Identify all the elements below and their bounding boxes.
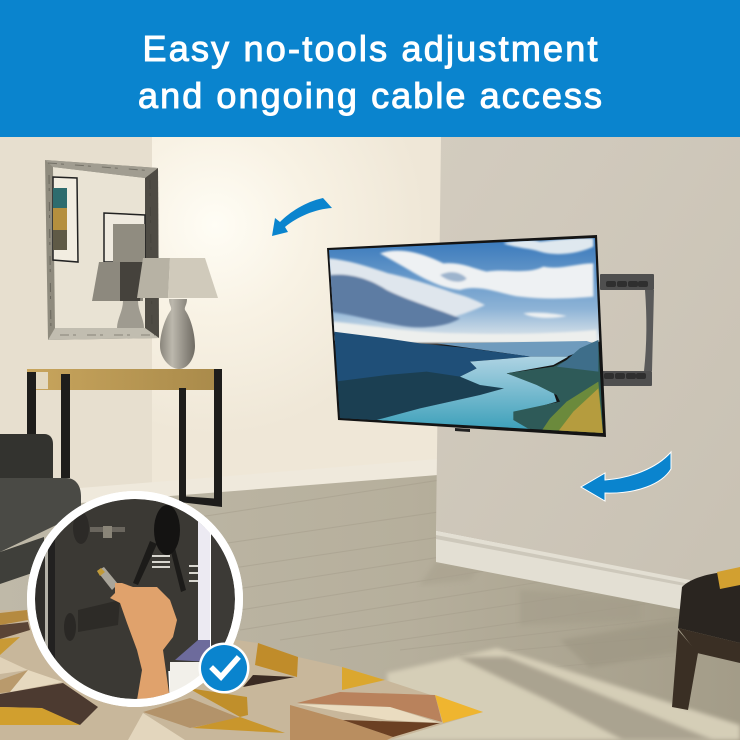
check badge bbox=[198, 642, 250, 694]
right shore bbox=[507, 340, 603, 437]
inset circle: cable access bbox=[27, 491, 250, 707]
hand bbox=[110, 583, 177, 700]
rug bbox=[0, 610, 483, 740]
console table bbox=[27, 369, 222, 507]
hills bbox=[437, 341, 598, 357]
arrow: top-left swing bbox=[272, 198, 332, 236]
television bbox=[320, 232, 607, 437]
title bbox=[138, 28, 602, 116]
chair bbox=[672, 567, 740, 710]
arrow: lower-right swing bbox=[581, 452, 671, 501]
reflected pictures bbox=[53, 177, 78, 262]
cables and bracket bbox=[133, 541, 186, 592]
left baseboard bbox=[80, 459, 438, 503]
clouds bbox=[328, 238, 597, 343]
mirror bbox=[45, 160, 159, 340]
floor bbox=[0, 474, 740, 740]
label stickers bbox=[152, 555, 198, 582]
sunlight on floor bbox=[387, 648, 740, 740]
right baseboard bbox=[436, 531, 690, 611]
table lamp bbox=[137, 258, 218, 369]
sofa bbox=[0, 434, 81, 584]
right wall bbox=[436, 137, 740, 600]
TV screen: lake landscape bbox=[320, 232, 607, 437]
reflected lamp bbox=[92, 262, 143, 301]
header banner bbox=[0, 0, 740, 137]
title: and ongoing cable access bbox=[138, 75, 602, 116]
wall mount arm bbox=[600, 274, 654, 386]
title: Easy no-tools adjustment bbox=[142, 28, 598, 69]
lake bbox=[377, 357, 568, 432]
HDMI plug bbox=[97, 567, 118, 590]
